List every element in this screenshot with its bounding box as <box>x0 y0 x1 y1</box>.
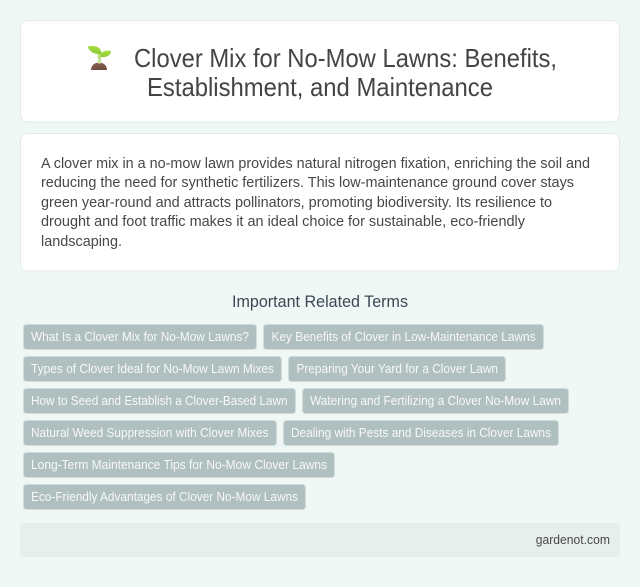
heading: important related terms: Important Related Terms <box>232 292 408 311</box>
chip: watering and fertilizing: Watering and Fertilizing a Clover No-Mow Lawn <box>310 393 561 408</box>
summary text: reducing the need for synthetic fertilizers. This low-maintenance ground cover stays <box>41 174 574 191</box>
chip: types of clover: Types of Clover Ideal for No-Mow Lawn Mixes <box>31 361 274 376</box>
footer source text: gardenot.com <box>536 532 610 547</box>
title: Clover Mix for No-Mow Lawns: Benefits, <box>134 45 557 73</box>
icon: sprout <box>88 46 111 70</box>
chip: how to seed <box>24 388 296 414</box>
footer bar <box>20 523 620 557</box>
panel: summary card <box>20 134 620 271</box>
chip: watering and fertilizing <box>302 388 568 414</box>
summary text: landscaping. <box>41 233 122 250</box>
chip: natural weed suppression: Natural Weed Suppression with Clover Mixes <box>31 425 269 440</box>
related terms chips <box>24 324 568 510</box>
title <box>134 45 557 102</box>
chip: eco-friendly advantages: Eco-Friendly Advantages of Clover No-Mow Lawns <box>31 489 298 504</box>
panel: title card <box>20 20 620 122</box>
chip: pests and diseases: Dealing with Pests and Diseases in Clover Lawns <box>291 425 551 440</box>
chip: key benefits: Key Benefits of Clover in Low-Maintenance Lawns <box>272 329 536 344</box>
chip: how to seed: How to Seed and Establish a Clover-Based Lawn <box>31 393 288 408</box>
title: Establishment, and Maintenance <box>147 74 493 102</box>
chip: types of clover <box>24 356 282 382</box>
chip: what is a clover mix: What Is a Clover Mix for No-Mow Lawns? <box>31 329 249 344</box>
chip: eco-friendly advantages <box>24 484 306 510</box>
chip: long-term maintenance <box>24 452 334 478</box>
chip: natural weed suppression <box>24 420 276 446</box>
chip: what is a clover mix <box>24 324 256 350</box>
chip: long-term maintenance: Long-Term Maintenance Tips for No-Mow Clover Lawns <box>31 457 327 472</box>
summary text: drought and foot traffic makes it an ideal choice for sustainable, eco-friendly <box>41 213 525 230</box>
chip: preparing your yard <box>288 356 506 382</box>
chip: preparing your yard: Preparing Your Yard for a Clover Lawn <box>296 361 498 376</box>
summary text <box>41 155 590 250</box>
summary text: green year-round and attracts pollinators, promoting biodiversity. Its resilience to <box>41 194 552 211</box>
chip: pests and diseases <box>284 420 558 446</box>
summary text: A clover mix in a no-mow lawn provides natural nitrogen fixation, enriching the soil and <box>41 155 590 172</box>
chip: key benefits <box>264 324 544 350</box>
